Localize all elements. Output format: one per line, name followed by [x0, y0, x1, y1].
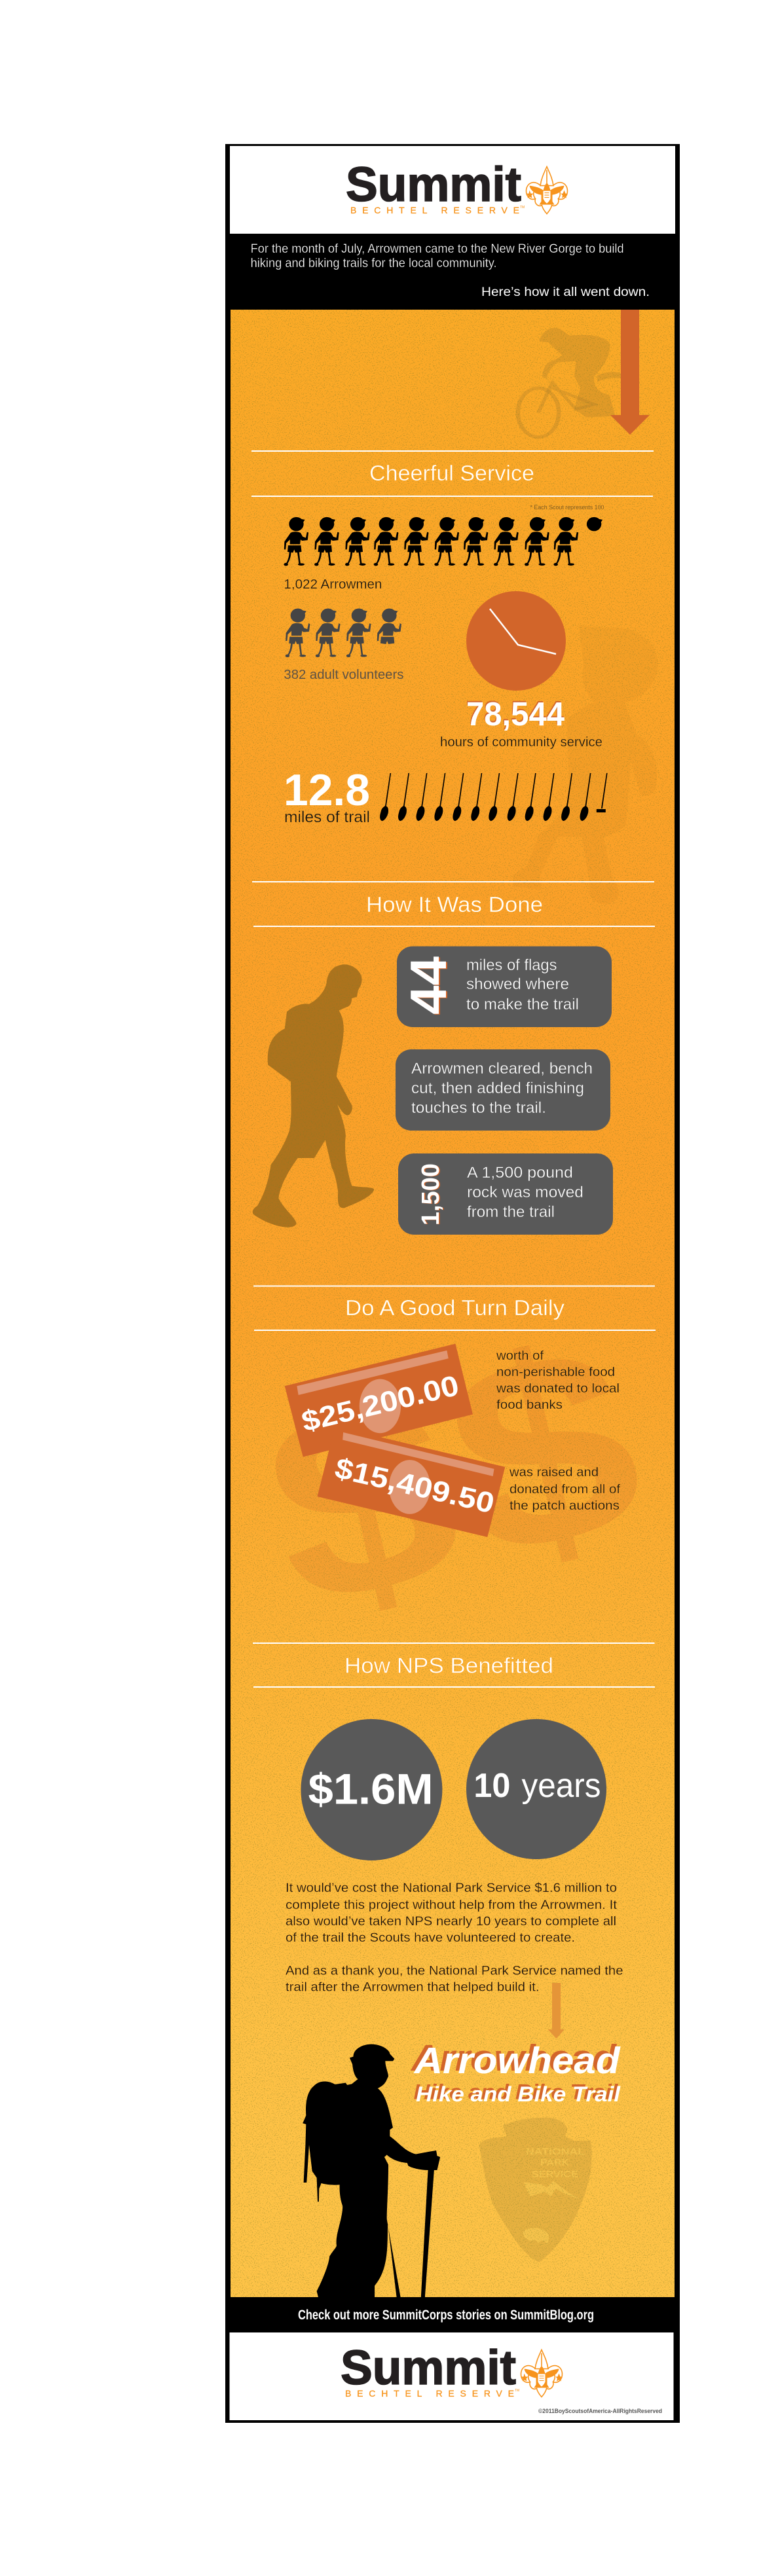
callout: 1,500 pound rock: 1,500: [417, 1163, 445, 1225]
title: Arrowhead Hike and Bike Trail: Hike and Bike Trail: [416, 2082, 621, 2106]
text: food donation: was donated to local: [496, 1382, 620, 1396]
pictogram: 1,022 Arrowmen scouts: [284, 517, 602, 566]
icon: faint hiker behind Cheerful Service: [513, 625, 658, 904]
callout: 44 miles of flags: 44: [399, 956, 457, 1015]
text: food donation: food banks: [496, 1398, 563, 1412]
title: Arrowhead Hike and Bike Trail: Arrowhead: [410, 2037, 617, 2079]
icon: hiker with trekking poles: [303, 2044, 440, 2297]
text: patch auctions: donated from all of: [509, 1483, 621, 1497]
text: patch auctions: was raised and: [509, 1466, 599, 1479]
logo: Summit Bechtel Reserve: Summit: [346, 157, 521, 211]
arrow: large down arrow: [610, 310, 650, 435]
label: hours of community service: hours of community service: [440, 735, 602, 750]
callout: 44 miles of flags: to make the trail: [466, 996, 579, 1013]
callout: 44 miles of flags: 44: [401, 957, 458, 1015]
section: Cheerful Service: [251, 450, 654, 826]
text: food donation: non-perishable food: [496, 1366, 615, 1379]
stat circle: 10 years: [466, 1719, 606, 1859]
icon: walking hiker silhouette: [253, 964, 374, 1227]
icon: National Park Service arrowhead badge: PARK: [540, 2157, 569, 2168]
text: NPS explanation: [286, 1881, 623, 1994]
callout: 1,500 pound rock: 1,500: [418, 1164, 445, 1225]
icon: faint dollar signs: [242, 1284, 665, 1665]
panel: footer call to action: [230, 2297, 675, 2332]
pictogram: shovels: [380, 773, 608, 821]
stat circle: $1.6M: $1.6M: [308, 1765, 434, 1813]
bill: $15,409.50: $15,409.50: [332, 1452, 497, 1520]
callout: trail work steps: cut, then added finishing: [411, 1079, 584, 1097]
text: NPS explanation: of the trail the Scouts have volunteered to create.: [286, 1931, 575, 1945]
logo: Summit Bechtel Reserve: BECHTEL RESERVE: [350, 205, 519, 215]
logo: Summit Bechtel Reserve: TM: [520, 206, 525, 209]
panel: top logo header: [230, 146, 675, 234]
section: Do A Good Turn Daily: [253, 1286, 656, 1537]
text: NPS explanation: trail after the Arrowmen that helped build it.: [286, 1981, 540, 1994]
title: Arrowhead Hike and Bike Trail: Hike and Bike Trail: [414, 2080, 619, 2104]
stat circle: 10 years: years: [521, 1767, 601, 1805]
orange textured background: [231, 310, 675, 2297]
text: patch auctions: [509, 1466, 621, 1513]
callout: 1,500 pound rock: from the trail: [467, 1203, 555, 1221]
icon: faint dollar signs: $: [242, 1333, 483, 1665]
callout: 1,500 pound rock: A 1,500 pound: [467, 1164, 573, 1182]
callout: trail work steps: touches to the trail.: [411, 1099, 546, 1117]
icon: clock: [466, 591, 566, 691]
text: food donation: worth of: [496, 1349, 544, 1363]
callout: 1,500 pound rock: [398, 1153, 613, 1235]
icon: fleur-de-lis: [521, 2350, 563, 2397]
icon: fleur-de-lis: [526, 167, 568, 214]
text: NPS explanation: also would’ve taken NPS nearly 10 years to complete all: [286, 1915, 616, 1929]
icon: faint dollar signs: $: [423, 1284, 665, 1617]
text: NPS explanation: It would’ve cost the National Park Service $1.6 million to: [286, 1881, 617, 1895]
section: How It Was Done: [252, 881, 655, 1235]
callout: 44 miles of flags: showed where: [466, 975, 569, 993]
note: scale of scout icons: * Each Scout represents 100: [530, 504, 604, 511]
title: Arrowhead Hike and Bike Trail: Arrowhead: [413, 2040, 621, 2082]
heading: How NPS Benefitted: How NPS Benefitted: [344, 1654, 553, 1677]
callout: trail work steps: [396, 1049, 610, 1131]
paper grain texture: [231, 310, 675, 2297]
panel: footer logo: [229, 2332, 673, 2420]
logo: Summit Bechtel Reserve: Summit: [341, 2340, 516, 2395]
text: NPS explanation: complete this project without help from the Arrowmen. It: [286, 1898, 618, 1912]
heading: Do A Good Turn Daily: Do A Good Turn Daily: [345, 1296, 565, 1320]
label: 382 adult volunteers: 382 adult volunteers: [284, 668, 403, 682]
stat: 12.8 miles of trail: 12.8: [284, 765, 370, 815]
panel: intro text: For the month of July, Arrowmen came to the New River Gorge to build: [251, 242, 624, 256]
callout: trail work steps: Arrowmen cleared, bench: [411, 1060, 593, 1078]
callout: 1,500 pound rock: rock was moved: [467, 1184, 584, 1201]
title: Arrowhead Hike and Bike Trail: [410, 2037, 621, 2106]
callout: 44 miles of flags: [397, 947, 612, 1027]
panel: footer call to action: Check out more SummitCorps stories on SummitBlog.org: [298, 2308, 594, 2323]
stat: 12.8 miles of trail: miles of trail: [284, 808, 370, 826]
pictogram: 382 adult volunteers scouts: [286, 608, 401, 657]
logo: Summit Bechtel Reserve: TM: [515, 2389, 519, 2393]
icon: faint mountain biker: [518, 328, 621, 437]
icon: National Park Service arrowhead badge: [479, 2118, 592, 2262]
stat: 78,544 hours: 78,544: [466, 695, 565, 733]
copyright: ©2011BoyScoutsofAmerica-AllRightsReserved: [538, 2408, 662, 2415]
panel: intro text: hiking and biking trails for the local community.: [251, 257, 497, 270]
stat: 78,544 hours: 78,544: [466, 694, 565, 731]
icon: National Park Service arrowhead badge: SERVICE: [532, 2169, 578, 2180]
stat circle: $1.6M: [301, 1719, 442, 1860]
stat circle: 10 years: 10: [473, 1767, 510, 1805]
bill: $15,409.50: [318, 1426, 505, 1537]
section: How NPS Benefitted: [253, 1642, 655, 2297]
logo: Summit Bechtel Reserve: BECHTEL RESERVE: [345, 2388, 514, 2399]
panel: intro text: Here’s how it all went down.: [481, 285, 650, 299]
bill: $25,200.00: [285, 1344, 473, 1457]
callout: 44 miles of flags: miles of flags: [466, 956, 557, 974]
icon: National Park Service arrowhead badge: NATIONAL: [526, 2146, 585, 2158]
label: 1,022 Arrowmen: 1,022 Arrowmen: [284, 577, 382, 592]
panel: intro text: [230, 234, 675, 310]
heading: How It Was Done: How It Was Done: [366, 892, 543, 916]
text: food donation: [496, 1349, 620, 1412]
arrow: small down arrow: [547, 1983, 565, 2039]
text: patch auctions: the patch auctions: [509, 1499, 620, 1513]
text: NPS explanation: And as a thank you, the National Park Service named the: [286, 1964, 623, 1978]
outer black frame: [225, 144, 680, 2423]
bill: $25,200.00: $25,200.00: [299, 1370, 462, 1438]
heading: Cheerful Service: Cheerful Service: [369, 461, 534, 485]
